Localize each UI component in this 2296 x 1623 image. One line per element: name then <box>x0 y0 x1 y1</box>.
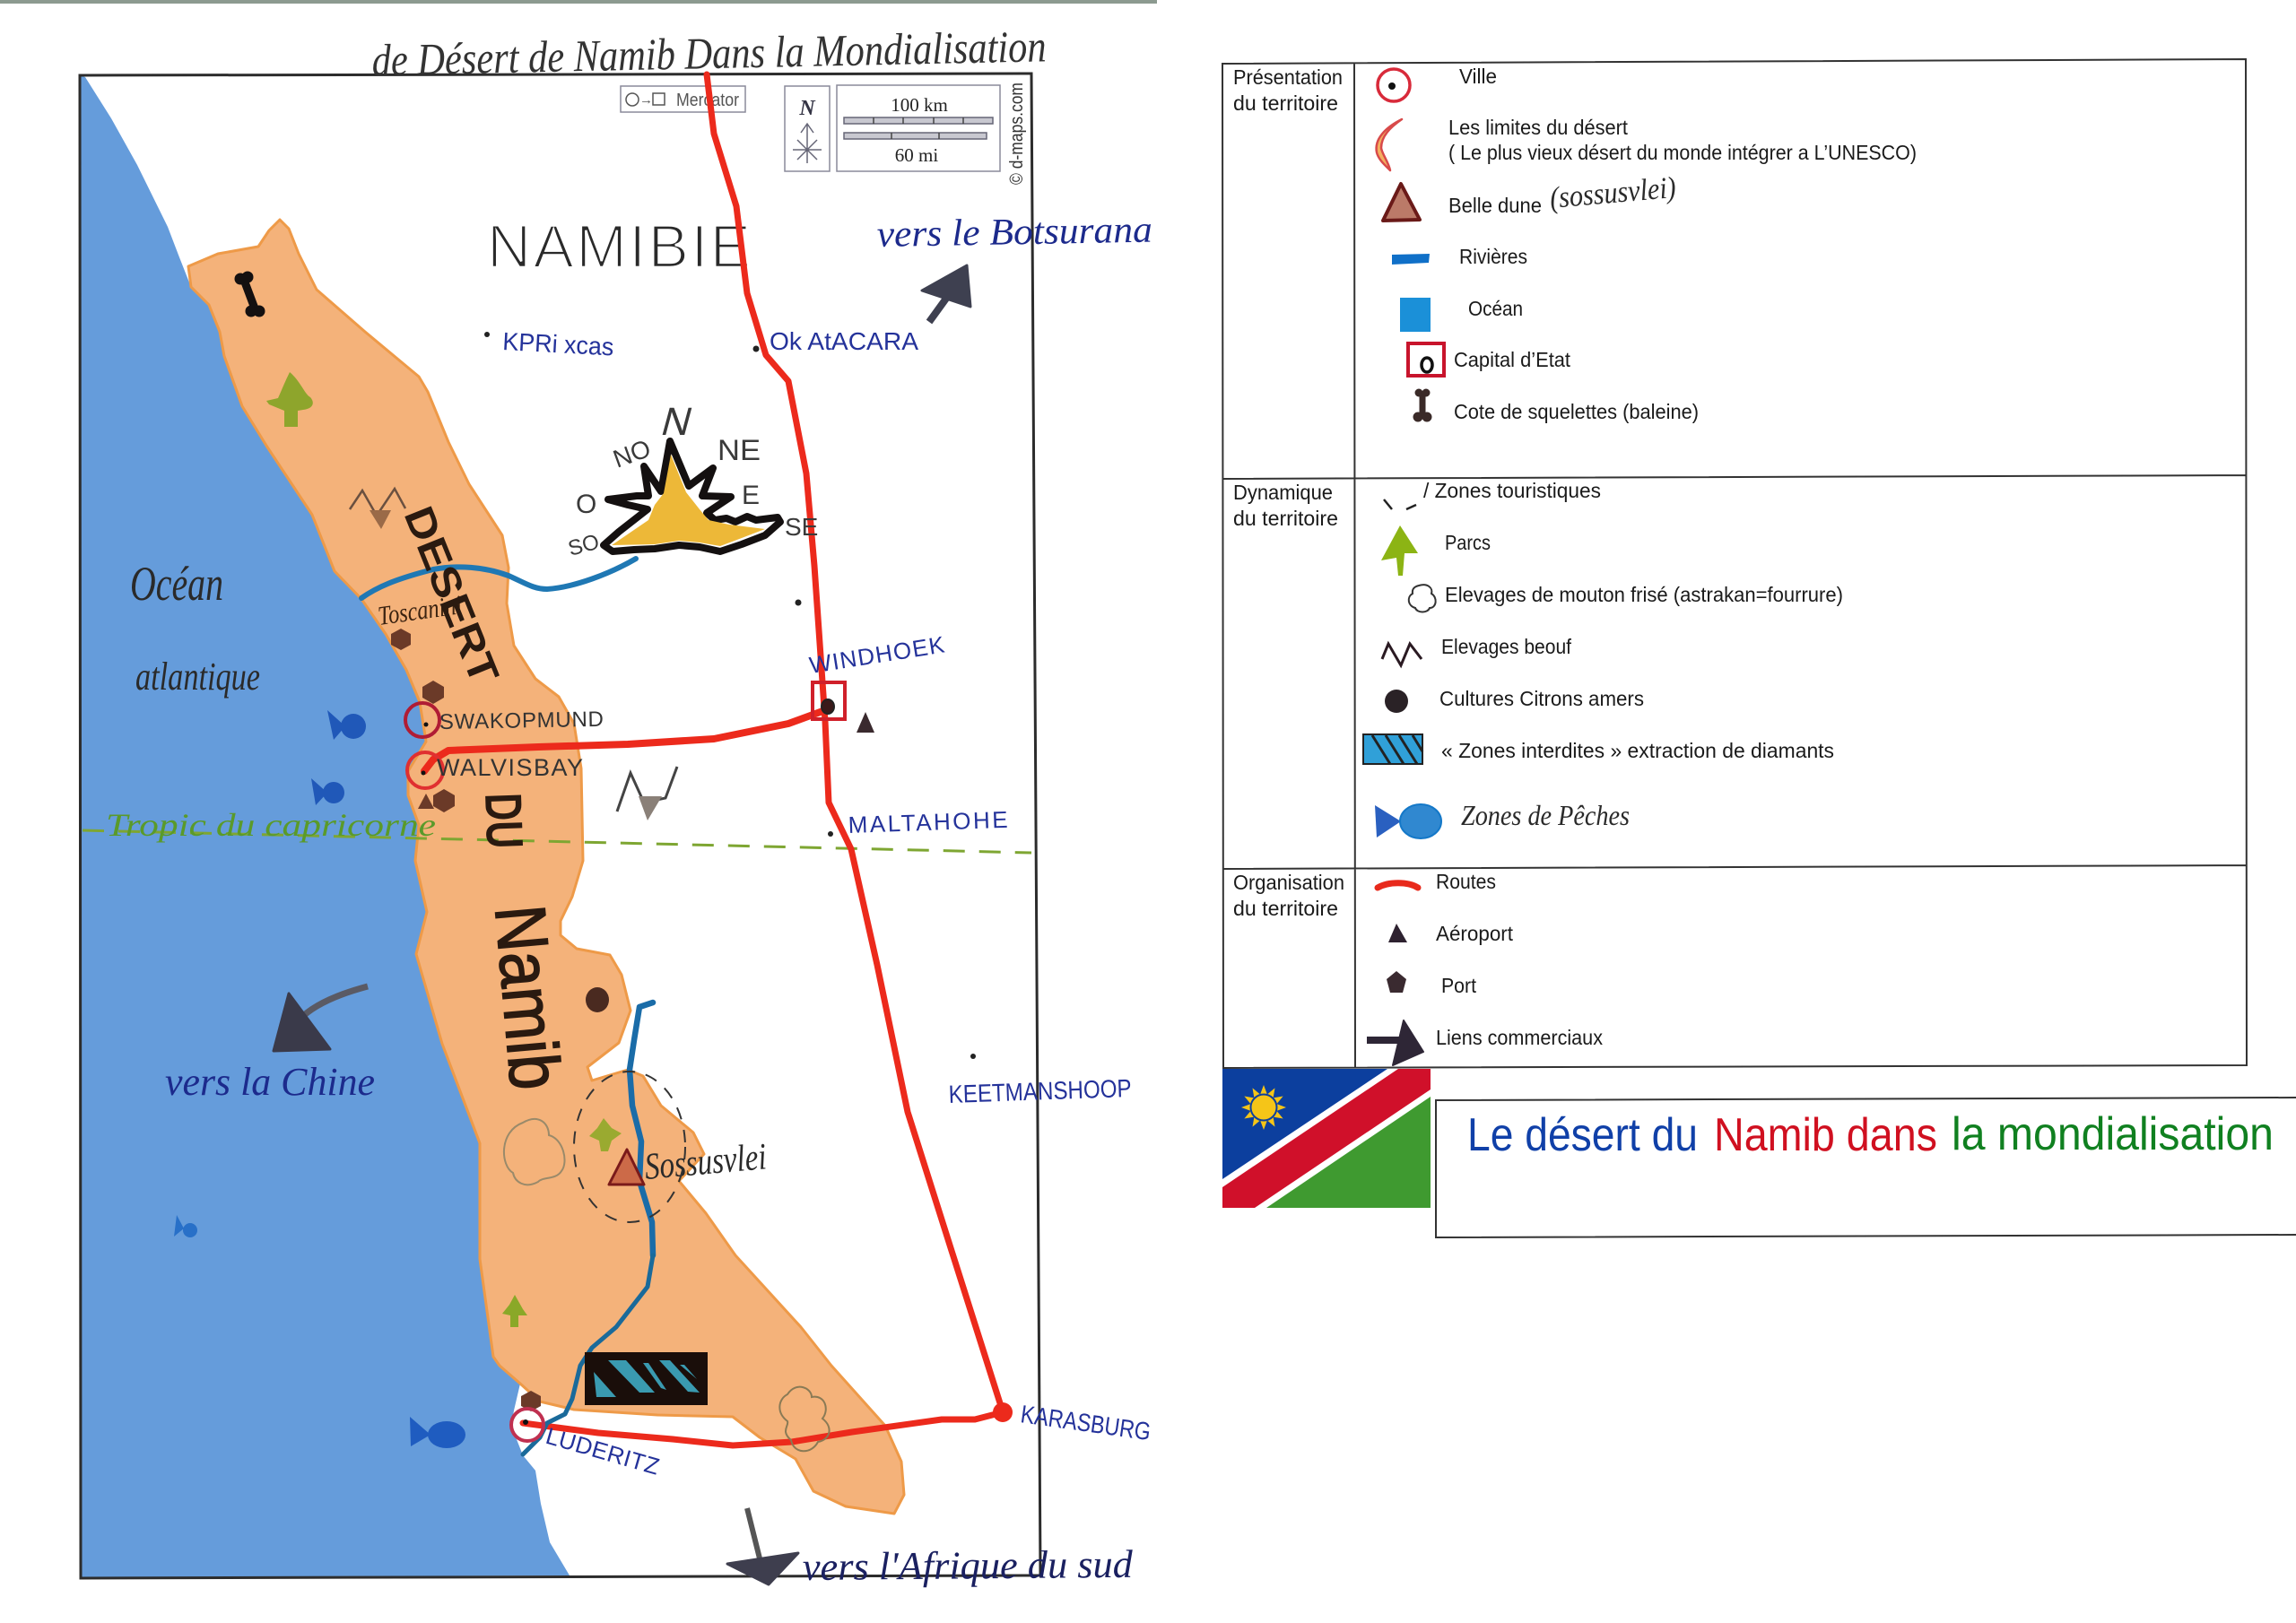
Keetmanshoop label: KEETMANSHOOP <box>948 1074 1132 1108</box>
flag sun <box>1241 1085 1286 1130</box>
desert name: DU: DU <box>474 792 534 849</box>
map frame <box>80 74 1040 1578</box>
desert name: DESERT: DESERT <box>396 499 509 690</box>
label: to China: vers la Chine <box>165 1060 375 1104</box>
title: red part: Namib dans <box>1714 1109 1937 1161</box>
Walvis Bay label: WALVISBAY <box>437 754 583 781</box>
icon: forbidden zones <box>1363 734 1422 764</box>
icon: ocean <box>1400 298 1431 332</box>
credit: © d-maps.com <box>1007 82 1027 185</box>
icon: road <box>1378 883 1418 888</box>
Okahakara label: Ok AtACARA <box>770 327 918 355</box>
label: dune: Belle dune <box>1448 194 1542 217</box>
scale box <box>837 85 1000 171</box>
label: road: Routes <box>1436 870 1496 893</box>
north box <box>785 86 830 171</box>
label: park: Parcs <box>1445 531 1491 554</box>
label: river: Rivières <box>1459 245 1527 268</box>
icon: trade links <box>1367 1020 1423 1065</box>
scale box: 60 mi <box>895 144 938 166</box>
label: lemon crop: Cultures Citrons amers <box>1439 687 1644 710</box>
compass rose: E <box>742 481 760 510</box>
section heading <box>1233 65 1343 115</box>
title: green part: la mondialisation <box>1952 1108 2274 1160</box>
ocean label second line: atlantique <box>135 655 260 699</box>
section heading: Dynamique <box>1233 481 1333 504</box>
icon: Windhoek capital <box>813 682 845 719</box>
icon: forbidden diamond zone <box>585 1352 708 1405</box>
section heading: Organisation <box>1233 871 1344 894</box>
label: tourist zones: / Zones touristiques <box>1423 479 1601 502</box>
handwritten note: sossusvlei: (sossusvlei) <box>1548 171 1677 215</box>
Swakopmund label: SWAKOPMUND <box>439 707 604 734</box>
handwritten map title: de Désert de Namib Dans la Mondialisation <box>371 21 1047 85</box>
icon: desert limits <box>1377 119 1402 170</box>
icon: river <box>1392 254 1430 265</box>
Sossusvlei label: Sossusvlei <box>643 1136 768 1188</box>
icon: Walvis Bay city <box>407 752 443 788</box>
icon: Luderitz city <box>511 1409 544 1441</box>
icon: tourist zones <box>1384 499 1416 509</box>
arrow: to China <box>274 986 368 1051</box>
label: sheep: Elevages de mouton frisé (astrakan=fourrure) <box>1445 583 1843 606</box>
icon: sheep <box>779 1387 830 1451</box>
icon: cattle south <box>617 767 677 820</box>
compass rose: NE <box>718 434 761 466</box>
section: dynamics <box>1233 479 1843 838</box>
label: forbidden zones: « Zones interdites » extraction de diamants <box>1441 739 1834 762</box>
icon: sheep <box>504 1119 565 1185</box>
icon: Namibian flag <box>1222 1069 1431 1208</box>
icon: sheep <box>1409 585 1436 612</box>
icon: bitter lemon crop <box>586 987 609 1012</box>
icon: skeleton coast bone <box>235 272 265 317</box>
label: capital: Capital d’Etat <box>1454 348 1571 371</box>
compass rose: SO <box>566 530 602 561</box>
section: presentation <box>1233 65 1917 423</box>
icon: fish small <box>174 1215 197 1237</box>
icon: park tree south <box>502 1295 527 1327</box>
tropic label: Tropic du capricorne <box>106 807 436 843</box>
compass rose: N <box>657 400 697 444</box>
south river <box>523 1002 653 1454</box>
icon: fish <box>327 710 366 740</box>
icon: park tree north <box>266 372 313 427</box>
Windhoek label: WINDHOEK <box>807 630 947 679</box>
north river <box>361 559 636 598</box>
label: fishing zones: Zones de Pêches <box>1461 799 1630 831</box>
label: to South Africa: vers l'Afrique du sud <box>803 1542 1134 1589</box>
projection box <box>621 86 745 112</box>
ocean label: Océan <box>130 557 223 611</box>
icon: Swakopmund city <box>405 703 439 737</box>
icon: fish <box>1375 804 1441 838</box>
country label: NAMIBIE <box>487 213 751 281</box>
icon: city <box>1378 69 1410 101</box>
Karasburg road dot <box>993 1402 1013 1422</box>
icon: capital <box>1408 343 1444 376</box>
label: trade links: Liens commerciaux <box>1436 1026 1603 1049</box>
title box <box>1436 1098 2296 1237</box>
compass rose: O <box>576 490 596 519</box>
label: desert limits <box>1448 116 1917 164</box>
section heading: du territoire <box>1233 91 1338 115</box>
arrow: to South Africa <box>727 1508 798 1584</box>
section heading: du territoire <box>1233 897 1338 920</box>
icon: dune <box>1383 184 1420 221</box>
icon: ports <box>391 629 541 1411</box>
arrow: to Botswana <box>922 265 970 322</box>
compass rose: NO <box>609 434 655 473</box>
icon: cattle north <box>350 489 405 529</box>
section heading <box>1233 871 1344 920</box>
title: blue part: Le désert du <box>1467 1109 1698 1161</box>
icon: park <box>1381 525 1418 576</box>
label: airport: Aéroport <box>1436 922 1514 945</box>
desert name: Namib: Namib <box>480 902 576 1093</box>
section: organisation <box>1233 870 1603 1065</box>
icon: airport <box>1388 924 1407 942</box>
label: desert limits: ( Le plus vieux désert du monde intégrer a L’UNESCO) <box>1448 141 1917 164</box>
icon: skeleton bone <box>1413 389 1431 421</box>
label: city: Ville <box>1459 65 1497 88</box>
section heading <box>1233 481 1338 530</box>
icon: fish <box>311 778 344 805</box>
ocean <box>80 75 570 1577</box>
icon: lemon crop <box>1385 690 1408 713</box>
legend grid lines <box>1222 59 2247 1068</box>
north box: N <box>798 97 816 120</box>
map place labels <box>376 327 1152 1480</box>
icon: cattle <box>1382 644 1422 665</box>
tourist zone dashed oval <box>574 1072 685 1222</box>
label: port: Port <box>1441 974 1477 997</box>
compass rose <box>566 400 818 561</box>
Toscanini label: Toscanini <box>376 590 464 631</box>
projection box: → <box>639 92 653 108</box>
road network <box>424 74 1003 1445</box>
icon: beautiful dune <box>609 1150 644 1185</box>
label: cattle: Elevages beouf <box>1441 635 1572 658</box>
icon: port <box>1387 971 1406 993</box>
section heading: du territoire <box>1233 507 1338 530</box>
label: skeleton coast: Cote de squelettes (baleine) <box>1454 400 1699 423</box>
Kreiixas label: KPRi xcas <box>502 327 614 360</box>
icon: fish large <box>410 1417 465 1448</box>
Karasburg label: KARASBURG <box>1019 1400 1152 1445</box>
tropic of capricorn dashed line <box>83 830 1031 853</box>
projection box: Mercator <box>676 91 739 110</box>
scale box: 100 km <box>891 94 948 116</box>
compass rose: SE <box>785 513 818 541</box>
panel: legend table <box>1222 59 2247 1068</box>
label: ocean: Océan <box>1468 297 1523 320</box>
icon: park tree Sossusvlei <box>589 1118 622 1151</box>
label: to Botswana: vers le Botsurana <box>876 210 1152 256</box>
icon: airport <box>857 712 874 733</box>
Luderitz label: LUDERITZ <box>543 1422 663 1480</box>
label: desert limits: Les limites du désert <box>1448 116 1629 139</box>
desert area <box>188 220 904 1514</box>
Maltahohe label: MALTAHOHE <box>848 806 1008 838</box>
section heading: Présentation <box>1233 65 1343 89</box>
panel: map <box>80 21 1152 1589</box>
